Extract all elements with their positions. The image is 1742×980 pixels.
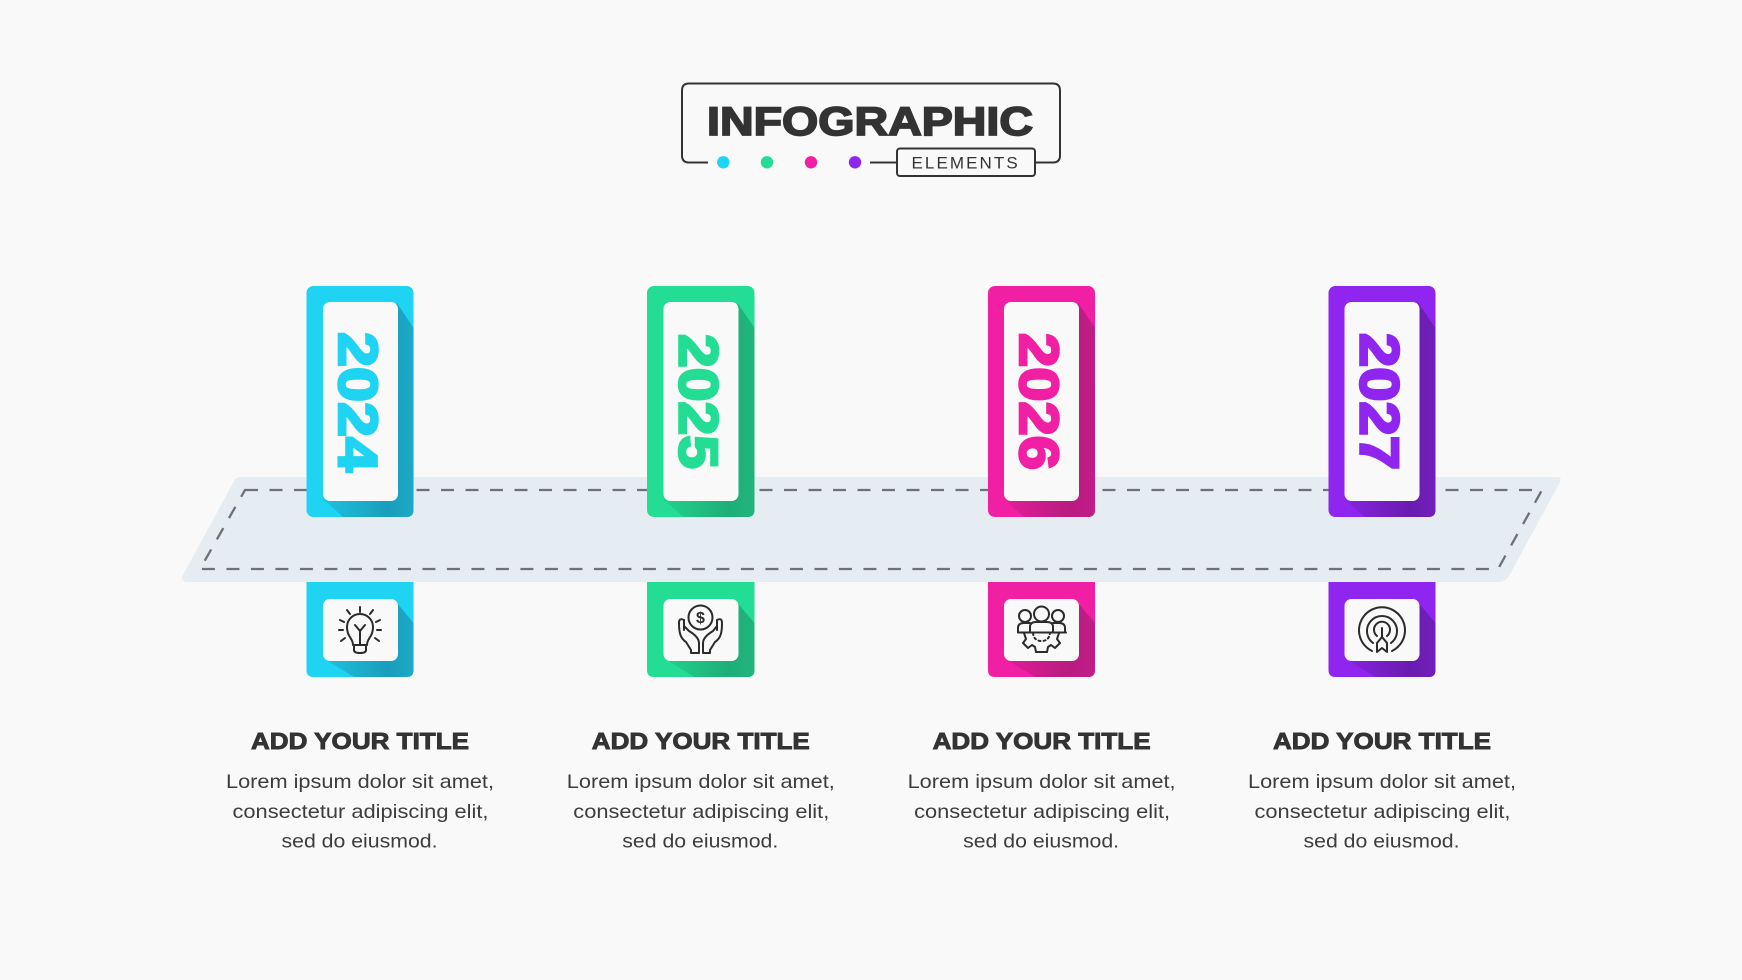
year card 2025 (647, 286, 754, 517)
body text: sed do eiusmod. (282, 830, 438, 852)
year card 2024: 2024 (327, 332, 389, 472)
title text: INFOGRAPHIC (707, 100, 1033, 144)
icon card: hands holding coin (647, 582, 754, 677)
year card 2026 (988, 286, 1095, 517)
year card 2025: 2025 (668, 334, 730, 469)
body text (908, 771, 1176, 852)
icon card: team and gear (988, 582, 1095, 677)
heading: ADD YOUR TITLE (933, 728, 1151, 754)
icon card: hands holding coin: $ (696, 610, 705, 627)
body text: sed do eiusmod. (1304, 830, 1460, 852)
year card 2024 (306, 286, 414, 517)
heading: ADD YOUR TITLE (1273, 728, 1491, 754)
elements tag (897, 148, 1035, 176)
colour dots (717, 156, 861, 168)
icon card: light bulb (306, 582, 414, 677)
column 2027 (1248, 286, 1516, 852)
year card 2027 (1328, 286, 1436, 517)
heading: ADD YOUR TITLE (251, 728, 469, 754)
body text: Lorem ipsum dolor sit amet, (226, 771, 494, 793)
body text: Lorem ipsum dolor sit amet, (908, 771, 1176, 793)
column 2025 (567, 286, 835, 852)
body text: Lorem ipsum dolor sit amet, (567, 771, 835, 793)
title block (682, 84, 1060, 176)
column 2024 (226, 286, 494, 852)
body text (1248, 771, 1516, 852)
icon card: target signal (1328, 582, 1436, 677)
year card 2026: 2026 (1008, 333, 1070, 470)
body text: sed do eiusmod. (622, 830, 778, 852)
heading: ADD YOUR TITLE (592, 728, 810, 754)
column 2026 (908, 286, 1176, 852)
body text: consectetur adipiscing elit, (1254, 801, 1510, 823)
body text: Lorem ipsum dolor sit amet, (1248, 771, 1516, 793)
body text (567, 771, 835, 852)
body text: consectetur adipiscing elit, (573, 801, 829, 823)
timeline band (182, 477, 1561, 582)
year card 2027: 2027 (1348, 333, 1410, 470)
body text: consectetur adipiscing elit, (232, 801, 488, 823)
elements tag: ELEMENTS (912, 153, 1019, 172)
body text: sed do eiusmod. (963, 830, 1119, 852)
body text (226, 771, 494, 852)
title frame (682, 84, 1060, 162)
body text: consectetur adipiscing elit, (914, 801, 1170, 823)
